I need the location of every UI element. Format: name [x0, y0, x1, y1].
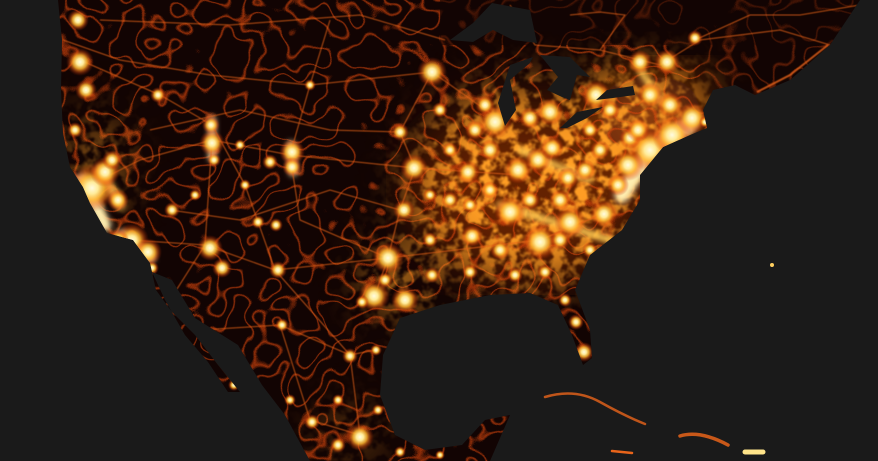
lake: Michigan: [498, 57, 533, 126]
lake: Ontario: [596, 86, 635, 100]
hotspots: [66, 9, 711, 460]
island: Bermuda: [771, 264, 773, 266]
regional glow: [415, 75, 705, 275]
island: Jamaica: [612, 451, 632, 453]
island: Puerto Rico: [745, 450, 763, 454]
lake: Erie: [560, 107, 603, 128]
Caribbean islands: [545, 264, 773, 453]
island: Cuba: [545, 393, 645, 424]
island: Hispaniola: [680, 434, 728, 445]
lake: Superior: [450, 3, 537, 43]
dense activity cells in the east: [62, 32, 728, 461]
lake: Huron: [540, 55, 590, 100]
Great Lakes: [450, 3, 635, 128]
major corridors: [82, 70, 690, 258]
